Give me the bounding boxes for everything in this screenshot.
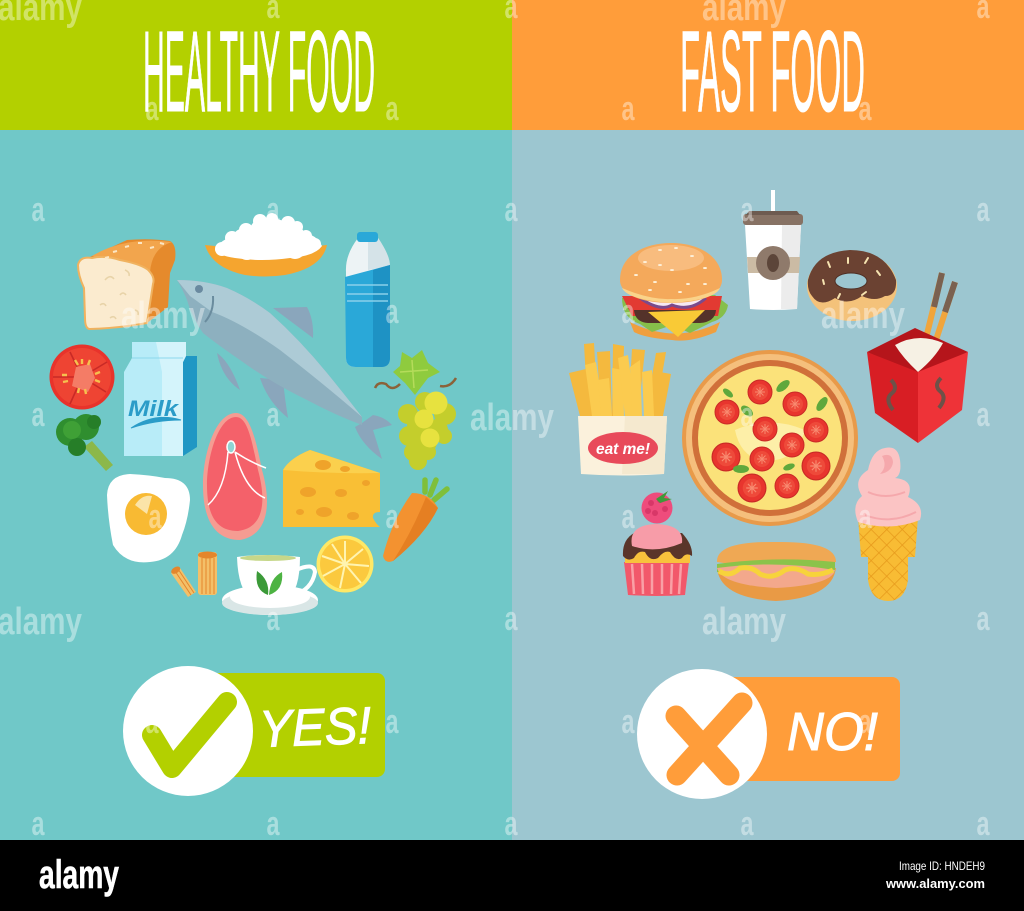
watermarks: a: [32, 396, 45, 434]
watermarks: a: [266, 396, 280, 434]
watermarks: a: [858, 90, 872, 128]
icon: steak: [203, 413, 267, 540]
watermarks: a: [976, 396, 990, 434]
icon: noodle box: [867, 273, 968, 443]
icon: hot dog: [717, 542, 836, 601]
watermarks: alamy: [0, 601, 82, 643]
watermarks: a: [386, 703, 399, 741]
icon: burger: [620, 243, 728, 341]
icon: cross mark: [637, 669, 767, 799]
watermarks: a: [622, 703, 635, 741]
watermarks: a: [740, 805, 754, 843]
icon: pizza: [682, 350, 858, 526]
watermarks: a: [622, 293, 635, 331]
icon: bowl of cottage cheese: [205, 213, 327, 276]
food circle: healthy items: [50, 213, 456, 615]
watermarks: a: [148, 498, 162, 536]
icon: pasta: [170, 552, 217, 597]
icon: fish: [177, 280, 392, 459]
watermarks: alamy: [821, 295, 905, 337]
heading band: fast food: [512, 0, 1024, 136]
badge: yes: [123, 666, 385, 796]
watermarks: a: [976, 600, 990, 638]
label bar: no: [720, 677, 900, 781]
icon: carrot: [383, 480, 447, 562]
icon: bread: [78, 239, 175, 329]
footer text: image id: Image ID: HNDEH9: [899, 859, 985, 873]
footer bar: [0, 840, 1024, 911]
watermarks: a: [386, 498, 399, 536]
watermarks: a: [504, 805, 518, 843]
icon: tomato slice: [50, 344, 114, 410]
panel: healthy food: [0, 0, 512, 840]
panel: fast food: [512, 0, 1024, 840]
watermarks: a: [858, 498, 872, 536]
watermarks: alamy: [702, 601, 786, 643]
watermarks: a: [32, 191, 45, 229]
icon: check mark: [123, 666, 253, 796]
icon: milk carton: Milk: [128, 396, 180, 421]
watermarks: a: [976, 191, 990, 229]
icon: lemon slice: [316, 536, 374, 592]
heading band: healthy food: [0, 0, 512, 136]
icon: grapes: [375, 350, 456, 470]
watermarks: a: [858, 703, 872, 741]
watermarks: a: [740, 396, 754, 434]
icon: tea cup: [222, 555, 318, 615]
label bar: yes: [210, 673, 385, 777]
watermarks: a: [504, 600, 518, 638]
watermarks: alamy: [121, 295, 205, 337]
icon: ice cream cone: [855, 448, 921, 601]
watermarks: a: [32, 805, 45, 843]
watermarks: a: [976, 805, 990, 843]
watermarks: a: [622, 90, 635, 128]
text: no: NO!: [787, 702, 878, 762]
icon: milk carton: [124, 342, 197, 456]
icon: water bottle: [345, 232, 390, 367]
infographic: healthy food vs fast food: HEALTHY FOOD: [143, 8, 375, 136]
watermarks: alamy: [470, 397, 554, 439]
watermarks: a: [622, 498, 635, 536]
icon: coffee cup: [743, 190, 803, 310]
badge: no: [637, 669, 900, 799]
watermarks: a: [146, 90, 159, 128]
icon: fried egg: [107, 474, 190, 562]
watermarks: a: [266, 600, 280, 638]
watermarks: a: [146, 703, 159, 741]
watermarks: a: [386, 293, 399, 331]
icon: french fries: eat me!: [596, 441, 651, 458]
food circle: fast items: [569, 190, 968, 601]
icon: french fries: [569, 343, 671, 476]
footer text: website: www.alamy.com: [885, 876, 985, 891]
watermarks: a: [504, 191, 518, 229]
icon: broccoli: [56, 414, 113, 471]
watermarks: a: [266, 191, 280, 229]
watermarks: a: [386, 90, 399, 128]
watermarks: a: [266, 805, 280, 843]
icon: cheese wedge: [283, 450, 380, 527]
icon: cupcake: [623, 491, 692, 596]
icon: donut: [807, 250, 897, 321]
text: yes: YES!: [258, 697, 372, 759]
footer logo: alamy: alamy: [39, 853, 120, 897]
watermarks: a: [740, 191, 754, 229]
